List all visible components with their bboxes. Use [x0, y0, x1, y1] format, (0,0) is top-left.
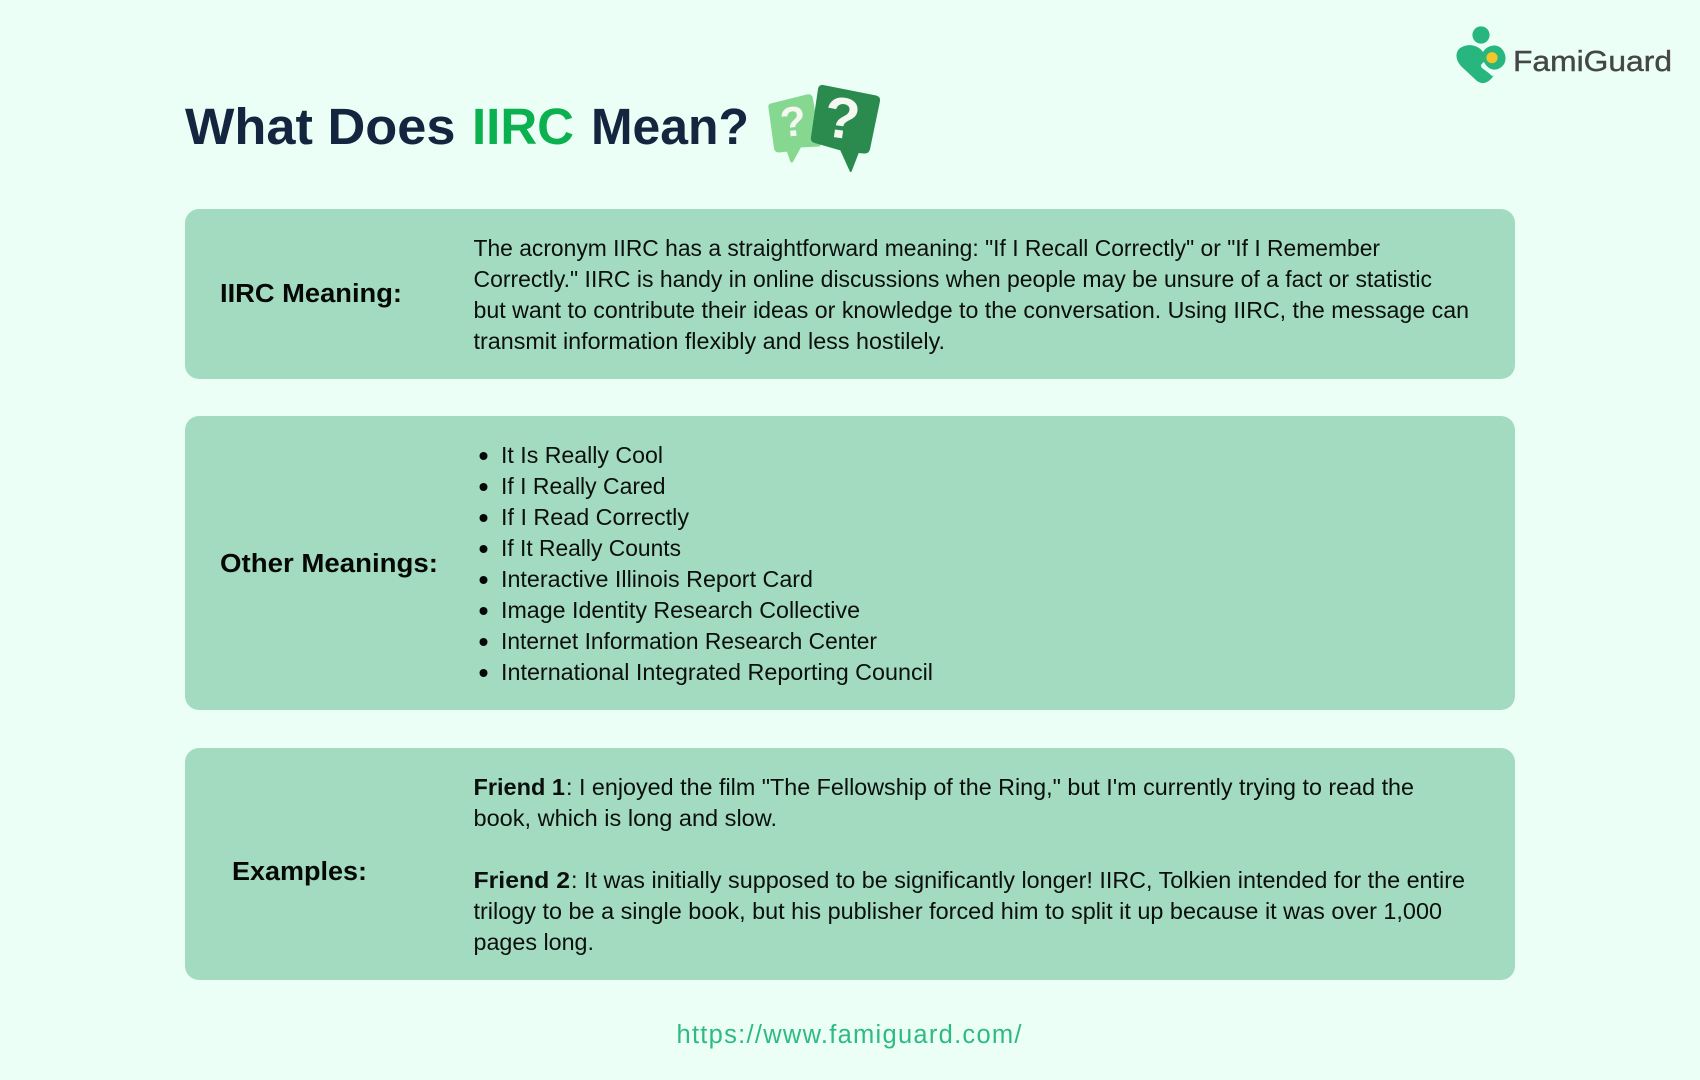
bullet list: Interactive Illinois Report Card: [501, 566, 813, 592]
logo: FamiGuard: [1456, 26, 1672, 83]
text block: meaning description: [474, 235, 1469, 354]
text block: meaning description: The acronym IIRC has a straightforward meaning: "If I Recall Correctly" or "If I Remember: [474, 235, 1380, 261]
text block: Friend 2: : It was initially supposed to be significantly longer! IIRC, Tolkien intended for the entire: [571, 867, 1465, 893]
bullet list: It Is Really Cool: [501, 442, 663, 468]
bullet list: [480, 442, 933, 685]
text block: meaning description: but want to contribute their ideas or knowledge to the conversation. Using IIRC, the message can: [474, 297, 1469, 323]
footer url: https://www.famiguard.com/: [676, 1021, 1022, 1049]
panel: examples: [185, 748, 1515, 980]
text block: meaning description: Correctly." IIRC is handy in online discussions when people may be unsure of a fact or statistic: [474, 266, 1432, 292]
bullet list: If It Really Counts: [501, 535, 681, 561]
text block: Friend 2: trilogy to be a single book, but his publisher forced him to split it up because it was over 1,000: [474, 898, 1442, 924]
text block: meaning description: transmit information flexibly and less hostilely.: [474, 328, 945, 354]
title: [185, 98, 749, 155]
title: IIRC: [472, 98, 574, 155]
bullet list: If I Read Correctly: [501, 504, 689, 530]
text block: Friend 1: book, which is long and slow.: [474, 805, 777, 831]
title: What Does: [185, 98, 456, 155]
light green bubble: ?: [778, 97, 808, 146]
text block: Friend 2: [474, 867, 1465, 955]
logo wordmark: FamiGuard: [1513, 46, 1672, 78]
icon: question speech bubbles: [770, 84, 879, 171]
heading: IIRC Meaning: IIRC Meaning:: [220, 280, 402, 308]
bullet list: Image Identity Research Collective: [501, 597, 860, 623]
text block: Friend 1: [474, 774, 1414, 831]
text block: Friend 2: Friend 2: [474, 867, 570, 893]
text block: Friend 2: pages long.: [474, 929, 594, 955]
bullet list: If I Really Cared: [501, 473, 666, 499]
panel: IIRC meaning: [185, 209, 1515, 379]
text block: Friend 1: Friend 1: [474, 774, 565, 800]
bullet list: Internet Information Research Center: [501, 628, 877, 654]
heading: Other Meanings: Other Meanings:: [220, 550, 438, 578]
text block: Friend 1: : I enjoyed the film "The Fellowship of the Ring," but I'm currently trying to read the: [566, 774, 1414, 800]
icon: FamiGuard heart: [1456, 26, 1506, 83]
panel: other meanings: [185, 416, 1515, 710]
heading: Examples: Examples:: [232, 858, 367, 886]
bullet list: International Integrated Reporting Council: [501, 659, 933, 685]
title: Mean?: [591, 98, 749, 155]
dark green bubble: ?: [820, 84, 864, 153]
